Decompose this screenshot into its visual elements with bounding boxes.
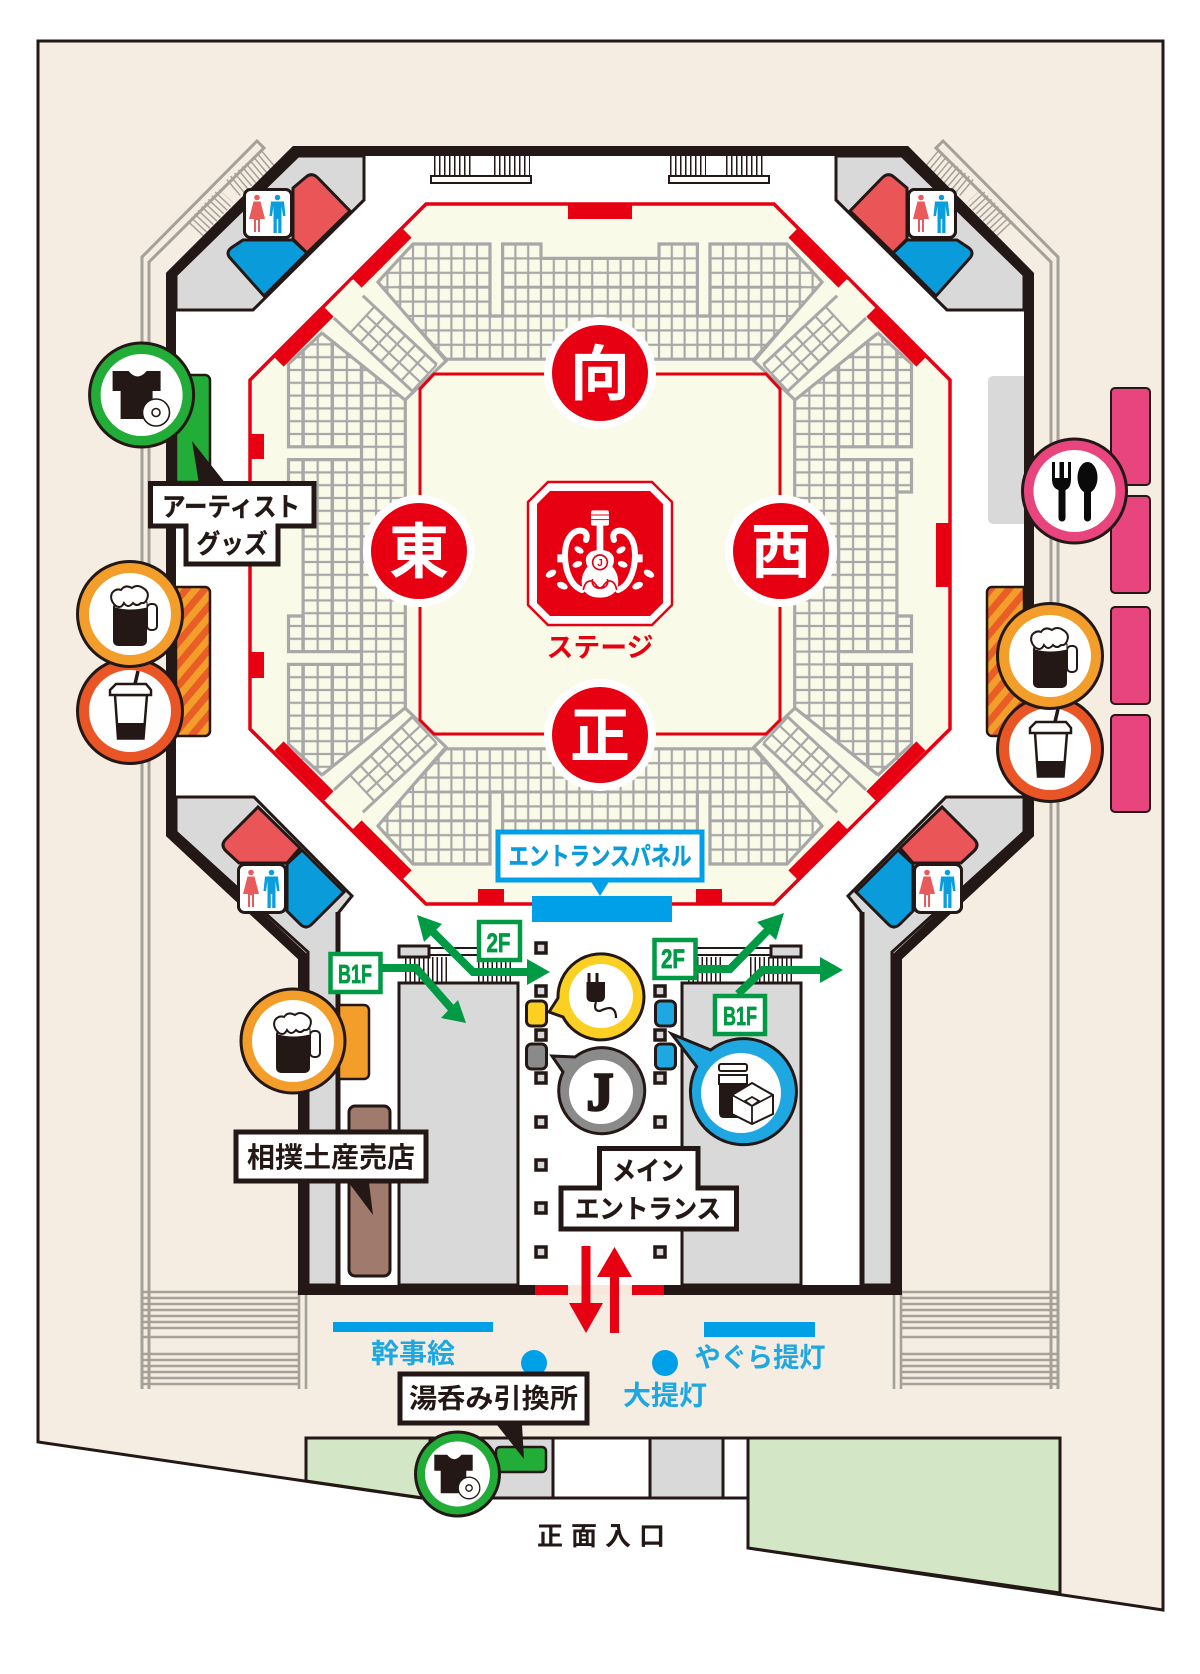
- side 西 marker: [725, 495, 837, 607]
- label: main entrance: [561, 1148, 736, 1229]
- coloured service kiosks: [526, 1001, 676, 1069]
- speech bubble: J logo: [552, 1048, 645, 1134]
- icon: food: [1022, 439, 1126, 543]
- lower left corner with toilets: [176, 797, 352, 1285]
- label: teacup exchange: [400, 1374, 587, 1459]
- speech bubble: power socket: [549, 954, 644, 1040]
- upper right toilet badge: [908, 190, 956, 238]
- speech bubble: J logo: J: [586, 1062, 614, 1122]
- side 向 marker: 向: [570, 341, 630, 408]
- side 東 marker: 東: [389, 519, 449, 586]
- lower right corner structure: [848, 797, 1024, 1285]
- text: front entrance: 正面入口: [537, 1521, 673, 1551]
- text: big lantern: 大提灯: [623, 1381, 707, 1411]
- text: kanji art: 幹事絵: [371, 1339, 455, 1369]
- west artist goods stall: [176, 375, 210, 482]
- text: yagura lantern: やぐら提灯: [694, 1343, 826, 1373]
- dot: big lantern right: [652, 1350, 678, 1376]
- speech bubble: goods box: [672, 1034, 796, 1145]
- arena octagon floor: [250, 204, 950, 904]
- green arrow right 2F: [696, 913, 784, 969]
- floor tag 2F left: [479, 922, 520, 960]
- grey block on east concourse: [988, 376, 1024, 524]
- entrance panel bar: [532, 896, 672, 922]
- side 正 marker: [544, 679, 656, 791]
- pink food stalls: [1111, 388, 1150, 812]
- pillars: [536, 943, 665, 1257]
- floor tag 2F right: 2F: [661, 944, 685, 974]
- green arrow right B1F: [738, 957, 843, 994]
- west hatched drink stall: [176, 587, 210, 736]
- icon: beer east: [998, 604, 1102, 708]
- label: main entrance: メイン: [612, 1156, 684, 1186]
- icon: goods at front: [416, 1432, 500, 1516]
- icon stall: hall beer: [339, 1005, 369, 1079]
- dot: big lantern left: [521, 1350, 547, 1376]
- floor tag B1F left: B1F: [338, 959, 372, 989]
- entrance panel label: エントランスパネル: [508, 843, 692, 871]
- ring square: [420, 374, 780, 734]
- arena building outline: [171, 151, 1029, 1290]
- label: artist goods: [150, 441, 314, 564]
- front entrance building strip: [306, 1438, 1060, 1593]
- floor tag 2F right: [654, 940, 696, 978]
- icon: beer west: [78, 562, 182, 666]
- green arrow left 2F: [417, 915, 550, 985]
- label: artist goods: グッズ: [196, 529, 268, 559]
- top stair gates: [431, 166, 769, 183]
- label: sumo souvenir shop: [236, 1132, 426, 1215]
- outer walkway double lines and stairs: [142, 141, 1058, 1389]
- label: teacup exchange: 湯呑み引換所: [409, 1384, 578, 1414]
- lower right toilet badge: [914, 864, 962, 912]
- entrance hall blocks and gates: [337, 912, 863, 1285]
- side 正 marker: 正: [570, 703, 630, 770]
- floor tag B1F left: [330, 954, 380, 992]
- red up arrow: [597, 1247, 632, 1333]
- icon: drink east: [998, 696, 1102, 802]
- label: sumo souvenir shop: 相撲土産売店: [247, 1142, 415, 1173]
- side 向 marker: [544, 317, 656, 429]
- green arrow left B1F: [382, 968, 466, 1023]
- label: artist goods: アーティスト: [162, 492, 300, 522]
- label: main entrance: エントランス: [575, 1194, 721, 1224]
- entrance panel label: [498, 832, 702, 896]
- floor tag 2F left: 2F: [486, 928, 510, 958]
- red octagon doors: [250, 204, 950, 904]
- icon: goods at west concourse: [90, 343, 194, 447]
- red down arrow: [569, 1246, 603, 1333]
- upper left corner with toilets: [176, 156, 364, 310]
- floor tag B1F right: [715, 996, 765, 1034]
- display bar: kanji art: [333, 1322, 493, 1332]
- side 西 marker: 西: [751, 519, 811, 586]
- main entrance doors: [303, 1285, 664, 1295]
- stage logo: J: [597, 558, 603, 569]
- floor tag B1F right: B1F: [723, 1001, 757, 1031]
- upper right corner structure: [836, 156, 1024, 310]
- display bar: yagura lantern: [704, 1322, 815, 1337]
- teacup exchange stall: [496, 1447, 546, 1472]
- seating blocks: [288, 244, 912, 864]
- east hatched drink stall: [987, 587, 1024, 736]
- side 東 marker: [363, 495, 475, 607]
- icon: beer hall: [241, 989, 345, 1093]
- stage label: ステージ: [546, 633, 654, 663]
- stage logo: [528, 482, 672, 625]
- sumo souvenir stall: [349, 1106, 390, 1276]
- icon: drink west: [78, 658, 182, 764]
